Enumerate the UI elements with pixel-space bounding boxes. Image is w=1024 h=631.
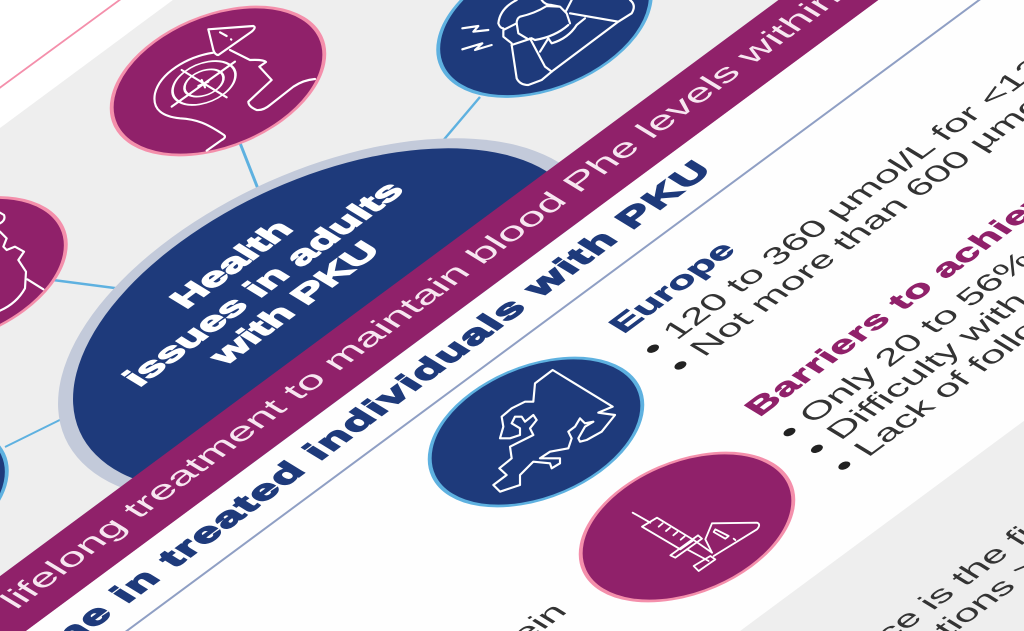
pink top rule: [0, 0, 125, 95]
text block: Europe targets: Europe: [601, 237, 743, 338]
icon circle: syringe with warning: [538, 425, 836, 629]
central circle: health issues in adults with PKU: issues in adults: [115, 176, 412, 392]
icon circle: person with headache: [396, 0, 693, 124]
connector lines: [5, 97, 480, 447]
icon circle: body with organs: [0, 170, 108, 373]
icon circle: map of Europe: [387, 330, 685, 534]
icon circle: bottom left blue: [0, 396, 49, 600]
central circle: health issues in adults with PKU: Health: [162, 215, 301, 314]
central circle: health issues in adults with PKU: with PKU: [201, 236, 388, 370]
central circle: health issues in adults with PKU: [4, 64, 656, 576]
icon circle: head with target: [69, 0, 367, 183]
